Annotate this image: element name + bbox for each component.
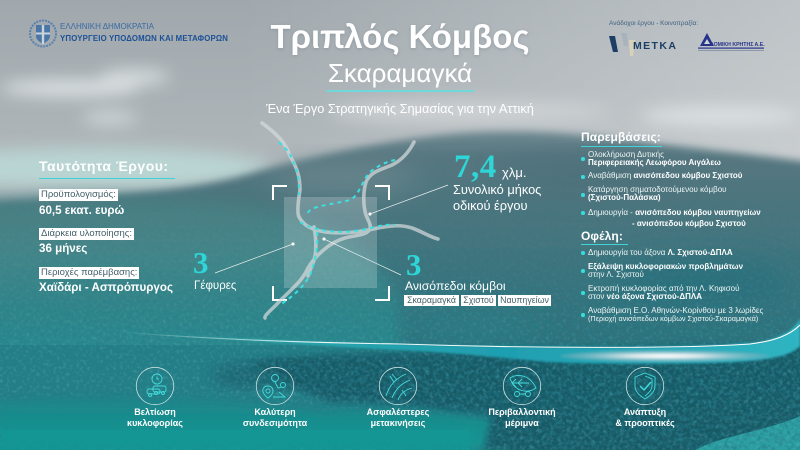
areas label: Περιοχές παρέμβασης: (41, 267, 137, 278)
callout: 7.4 km: 7,4 (454, 149, 497, 185)
panel: interventions: Δημιουργία - ανισόπεδου κόμβου ναυπηγείων (588, 208, 761, 217)
panel: interventions: (Σχιστού-Παλάσκα) (588, 193, 661, 202)
feature: environmental care (488, 366, 556, 428)
panel: project identity: Χαϊδάρι - Ασπρόπυργος (39, 281, 173, 294)
logo: ministry emblem and name (29, 20, 228, 48)
list items (581, 251, 584, 254)
list items (581, 157, 584, 160)
panel: benefits: (Περιοχή ανισόπεδων κόμβων Σχιστού-Σκαραμαγκά) (588, 314, 758, 323)
logo: Domiki Kritis: ΔΟΜΙΚΗ ΚΡΗΤΗΣ Α.Ε. (710, 42, 765, 48)
icon: map pins (256, 366, 294, 406)
icon: cars and clock (136, 366, 174, 406)
callout: 3 interchanges (404, 247, 551, 306)
callout: 7.4 km (453, 149, 541, 212)
callout: 3 interchanges: Ναυπηγείων (500, 295, 549, 305)
subtitle: place name: Σκαραμαγκά (328, 58, 472, 88)
panel: benefits (581, 229, 764, 323)
panel: interventions: Ολοκλήρωση Δυτικής (588, 150, 664, 159)
logo: Domiki Kritis (698, 33, 765, 51)
heading: Οφέλη: (581, 229, 623, 243)
icon: leaf car (502, 366, 542, 406)
icon: greek emblem (29, 20, 57, 48)
panel: interventions: Περιφερειακής Λεωφόρου Αιγάλεω (588, 158, 721, 167)
icon: shield check (626, 366, 664, 406)
panel: project identity: 60,5 εκατ. ευρώ (39, 204, 124, 217)
panel: benefits: Εξάλειψη κυκλοφοριακών προβλημάτων (588, 262, 743, 271)
feature: environmental care: μέριμνα (505, 418, 539, 428)
panel: benefits: στον νέο άξονα Σχιστού-ΔΠΛΑ (588, 292, 702, 301)
feature: traffic improvement: κυκλοφορίας (127, 418, 183, 428)
feature: growth and prospects (615, 366, 675, 428)
feature: growth and prospects: & προοπτικές (615, 418, 675, 428)
panel: interventions: - ανισόπεδου κόμβου Σχιστού (632, 219, 746, 228)
feature: safer travel: μετακινήσεις (371, 418, 425, 428)
feature: better connectivity: Καλύτερη (254, 407, 296, 417)
panel: interventions: Αναβάθμιση ανισόπεδου κόμβου Σχιστού (588, 171, 742, 180)
feature: better connectivity (243, 366, 307, 428)
tags: Σκαραμαγκά (407, 295, 456, 305)
title: Τριπλός Κόμβος (270, 18, 530, 55)
feature: environmental care: Περιβαλλοντική (488, 407, 556, 417)
logo: METKA: ΜΕΤΚΑ (633, 40, 677, 52)
contractors logos: Ανάδοχοι έργου - Κοινοπραξία: (609, 20, 698, 27)
callout: 7.4 km: χλμ. (502, 165, 526, 180)
callout: 7.4 km: οδικού έργου (453, 198, 528, 212)
callout: 3 interchanges: 3 (406, 247, 422, 282)
duration label: Διάρκεια υλοποίησης: (41, 228, 132, 239)
panel: benefits: στην Λ. Σχιστού (588, 270, 644, 279)
panel: benefits: Δημιουργία του άξονα Λ. Σχιστού-ΔΠΛΑ (588, 248, 733, 257)
callout: 3 bridges: Γέφυρες (194, 280, 236, 292)
feature: safer travel (366, 366, 429, 428)
feature: growth and prospects: Ανάπτυξη (624, 407, 666, 417)
callout: 3 bridges: 3 (193, 245, 208, 280)
callout: 3 interchanges: Σχιστού (463, 295, 494, 305)
feature: safer travel: Ασφαλέστερες (367, 407, 429, 417)
feature: better connectivity: συνδεσιμότητα (243, 418, 307, 428)
panel: interventions: Κατάργηση σηματοδοτούμενου κόμβου (588, 185, 727, 194)
panel: benefits: Εκτροπή κυκλοφορίας από την Λ. Κηφισού (588, 284, 739, 293)
panel: benefits: Αναβάθμιση Ε.Ο. Αθηνών-Κορίνθου με 3 λωρίδες (588, 306, 763, 315)
budget label: Προϋπολογισμός: (41, 189, 116, 200)
callout: 7.4 km: Συνολικό μήκος (453, 182, 541, 197)
callout: 3 interchanges: Ανισόπεδοι κόμβοι (405, 279, 506, 293)
feature: traffic improvement: Βελτίωση (134, 407, 176, 417)
contractors logos (609, 20, 765, 56)
panel: project identity (39, 158, 175, 294)
heading: Παρεμβάσεις: (581, 130, 661, 144)
callout: 3 bridges (193, 245, 236, 292)
heading: Ταυτότητα Έργου: (39, 158, 169, 174)
map: highlighted square, route lines, leader lines (214, 121, 448, 320)
logo: ministry emblem and name: ΥΠΟΥΡΓΕΙΟ ΥΠΟΔΟΜΩΝ ΚΑΙ ΜΕΤΑΦΟΡΩΝ (60, 34, 228, 43)
logo: ministry emblem and name: ΕΛΛΗΝΙΚΗ ΔΗΜΟΚΡΑΤΙΑ (60, 22, 154, 31)
icon: road (378, 366, 418, 406)
feature: traffic improvement (127, 366, 183, 428)
panel: interventions (581, 130, 761, 228)
panel: project identity: 36 μήνες (39, 242, 87, 255)
logo: METKA (609, 33, 677, 56)
tagline: Ένα Έργο Στρατηγικής Σημασίας για την Αττική (266, 101, 534, 116)
underline (326, 90, 474, 92)
